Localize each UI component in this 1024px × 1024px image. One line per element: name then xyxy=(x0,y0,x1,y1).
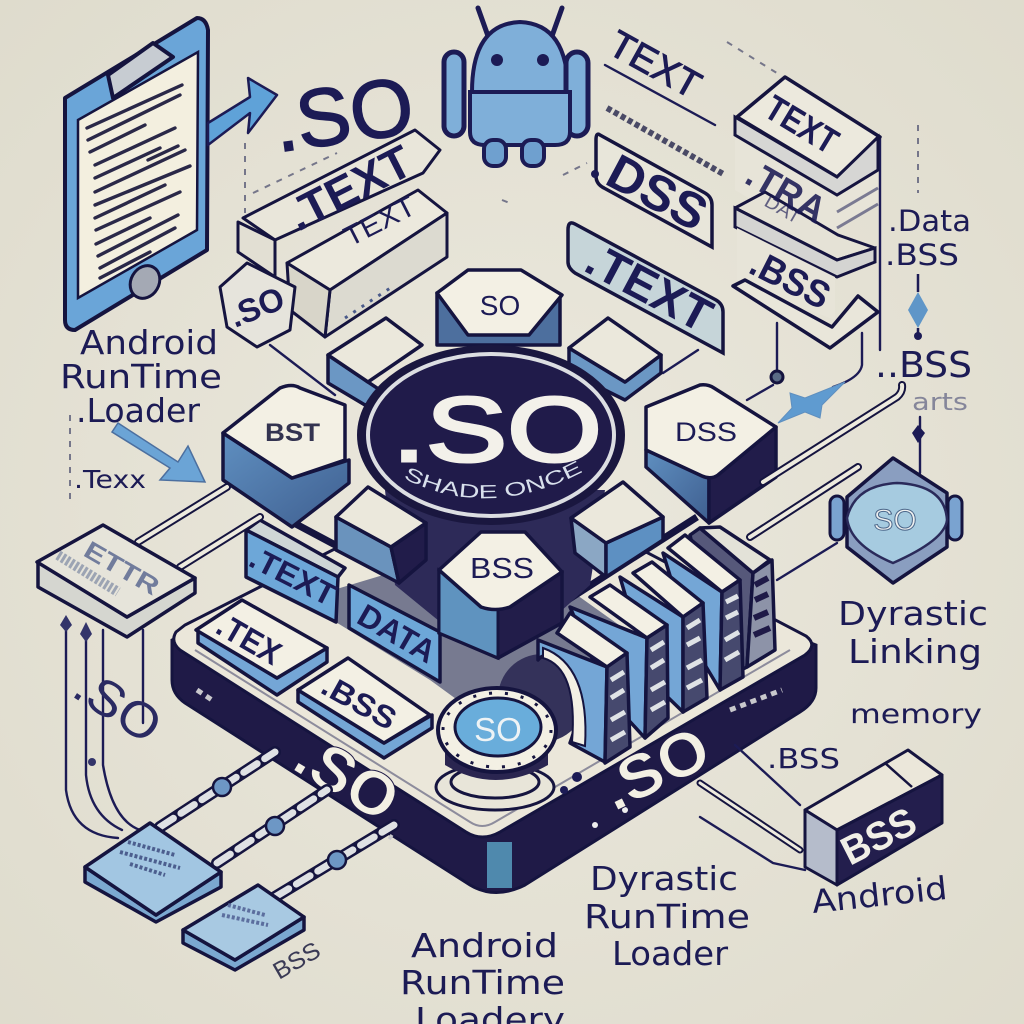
text block: Dyrastic Runtime Loader: Dyrastic xyxy=(590,859,738,898)
platform label: .SO right: .SO xyxy=(590,713,721,825)
central .SO badge: SHADE ONCE xyxy=(406,460,582,498)
icon: node and blue star xyxy=(771,371,845,423)
central .SO badge xyxy=(357,346,625,525)
tile: .TEXT lower xyxy=(196,600,327,695)
box: BSS server xyxy=(805,750,942,885)
tile: .BSS lower xyxy=(298,658,432,758)
text block: Android Runtime Loader left xyxy=(60,323,222,430)
label: .Data: .Data xyxy=(888,204,971,238)
label: ..BSS: ..BSS xyxy=(875,345,972,386)
heading: .SO top: .SO xyxy=(268,60,419,170)
hex: SO top xyxy=(437,270,562,345)
card: left board xyxy=(37,525,195,637)
tile: DATA: DATA xyxy=(352,597,442,670)
hex: left BST block: BST xyxy=(265,419,320,447)
platform shadow hatch xyxy=(300,540,640,760)
clipboard clip xyxy=(108,43,173,98)
book E xyxy=(690,528,753,680)
card: lower left 2 xyxy=(183,885,304,970)
book A xyxy=(498,654,586,742)
book B xyxy=(570,607,647,738)
text block: Dyrastic Runtime Loader: Loader xyxy=(612,934,728,973)
hex: right DSS block: DSS xyxy=(675,417,737,447)
stack: TEXT, DATA, BSS layers: .TRA xyxy=(738,153,833,232)
platform xyxy=(172,470,816,892)
chain links to cards xyxy=(160,752,394,897)
connectors: platform to box xyxy=(700,745,805,870)
label: .TEXT plate: .TEXT xyxy=(577,232,722,342)
book C xyxy=(620,577,683,712)
book D xyxy=(663,553,722,690)
tile: .TEXT lower: .TEX xyxy=(211,606,288,672)
hex: left-top block xyxy=(328,318,422,405)
central .SO badge: .SO xyxy=(392,379,602,481)
block stack: .TEXT outer boxes: TEXT xyxy=(339,190,420,252)
text block: Android Runtime Loader left: RunTime xyxy=(60,357,222,396)
hex: BSS bottom block xyxy=(439,532,562,658)
dial: SO round button: SO xyxy=(474,711,522,748)
stack: TEXT, DATA, BSS layers: DAT xyxy=(760,190,805,229)
text block: Android Runtime Loader left: Android xyxy=(80,323,218,362)
card: left board: ETTR xyxy=(79,536,164,601)
side cube: .SO xyxy=(220,263,295,347)
card: lower left 1 xyxy=(85,823,221,922)
box: BSS server: BSS xyxy=(834,799,924,874)
label: Android lower right: Android xyxy=(810,869,949,921)
text block: Android Runtime Loadery: RunTime xyxy=(400,963,565,1002)
cables: left drop lines xyxy=(60,615,140,838)
block stack: .TEXT outer boxes: .TEXT xyxy=(279,135,420,241)
text block: Dyrastic Runtime Loader xyxy=(584,859,750,973)
label: memory: memory xyxy=(850,699,982,730)
dial: SO round button xyxy=(436,688,582,810)
text block: Dyrastic Runtime Loader: RunTime xyxy=(584,897,750,936)
arrow: tablet to .so xyxy=(208,78,277,145)
text block: Android Runtime Loadery: Android xyxy=(411,926,558,965)
label: TEXT top right: TEXT xyxy=(602,23,708,107)
label: .SO vertical left: .SO xyxy=(64,657,172,754)
platform label: .SO left: .SO xyxy=(283,721,411,836)
icon: tablet with document xyxy=(65,18,208,330)
label: .BSS small: .BSS xyxy=(885,238,959,272)
books: binder row xyxy=(498,527,775,763)
hex: right DSS block xyxy=(646,385,776,523)
block stack: .TEXT outer boxes xyxy=(238,130,447,337)
hex: left BST block xyxy=(223,386,349,527)
label: .DSS plate: DSS xyxy=(598,143,717,242)
stack: TEXT, DATA, BSS layers xyxy=(733,77,880,348)
icon: android robot xyxy=(444,8,588,166)
side cube: .SO: .SO xyxy=(224,279,290,334)
label: BSS lower: BSS xyxy=(268,937,325,985)
tile: .BSS lower: .BSS xyxy=(316,668,403,737)
arrow: loader xyxy=(112,423,205,482)
text block: Android Runtime Loader left: .Loader xyxy=(76,391,200,430)
stack: TEXT, DATA, BSS layers: TEXT xyxy=(758,87,846,162)
label: TEXX: .Texx xyxy=(74,465,146,494)
icon: SO shield hub xyxy=(830,425,962,583)
label: arts: arts xyxy=(912,388,968,416)
label: .BSS lower right: .BSS xyxy=(767,742,840,775)
connector pipes to platform xyxy=(138,385,902,567)
text block: Dyrastic Linking: Dyrastic xyxy=(838,594,988,633)
hex: right-top block xyxy=(569,318,661,400)
tile: .TEXT front xyxy=(244,520,345,622)
hex: right-bottom block xyxy=(571,482,663,577)
icon: SO shield hub: SO xyxy=(873,504,917,537)
text block: Dyrastic Linking: Linking xyxy=(848,632,982,671)
tile: .TEXT front: .TEXT xyxy=(244,540,342,613)
hex: BSS bottom block: BSS xyxy=(470,553,534,585)
icon: blue diamond node xyxy=(908,274,928,340)
tier edges xyxy=(294,517,697,603)
stack: TEXT, DATA, BSS layers: .BSS xyxy=(743,243,837,318)
text block: Android Runtime Loadery xyxy=(400,926,565,1024)
connector lines background xyxy=(70,42,920,723)
center under-mass xyxy=(385,490,605,630)
label: TEXT top right xyxy=(602,23,725,175)
hex: SO top: SO xyxy=(480,290,520,321)
hex: left-bottom block xyxy=(336,487,426,583)
text block: Dyrastic Linking xyxy=(838,594,988,671)
